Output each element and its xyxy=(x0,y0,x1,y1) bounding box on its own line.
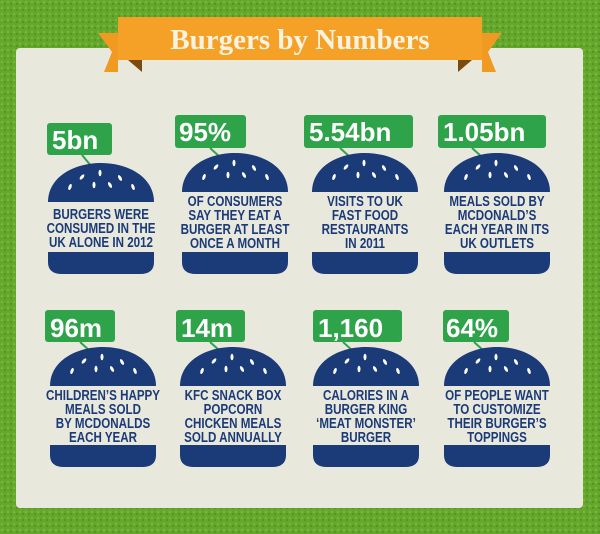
burger: 1,160 xyxy=(313,310,419,467)
burger: 5bn xyxy=(47,123,156,274)
burger: 1,160: 1,160 xyxy=(318,313,383,343)
burger: 96m: MEALS SOLD xyxy=(65,401,141,417)
burger: 5bn: UK ALONE IN 2012 xyxy=(49,234,153,250)
burger: 96m: CHILDREN’S HAPPY xyxy=(46,387,160,403)
burger: 5.54bn: FAST FOOD xyxy=(332,207,398,223)
burger: 14m: CHICKEN MEALS xyxy=(185,415,282,431)
burger: 96m: BY MCDONALDS xyxy=(56,415,150,431)
burger: 95% xyxy=(175,115,289,274)
title ribbon xyxy=(98,17,502,72)
burger: 1.05bn: MCDONALD’S xyxy=(458,207,537,223)
burger: 64%: OF PEOPLE WANT xyxy=(445,387,549,403)
burger: 96m: 96m xyxy=(50,313,102,343)
burger: 1.05bn: EACH YEAR IN ITS xyxy=(445,221,549,237)
burger: 5bn: BURGERS WERE xyxy=(53,206,149,222)
burger: 14m: 14m xyxy=(181,313,233,343)
burger: 14m: SOLD ANNUALLY xyxy=(184,429,282,445)
burger: 5.54bn: RESTAURANTS xyxy=(322,221,409,237)
burger: 1,160: BURGER KING xyxy=(325,401,407,417)
burger: 96m: EACH YEAR xyxy=(69,429,137,445)
burger: 14m: KFC SNACK BOX xyxy=(185,387,282,403)
burger: 14m: POPCORN xyxy=(204,401,262,417)
burger: 96m xyxy=(45,310,160,467)
burger: 5bn: CONSUMED IN THE xyxy=(47,220,156,236)
burger: 95%: BURGER AT LEAST xyxy=(181,221,289,237)
burger: 1,160: CALORIES IN A xyxy=(323,387,409,403)
burger: 1,160: ‘MEAT MONSTER’ xyxy=(316,415,416,431)
burger: 95%: 95% xyxy=(179,117,231,147)
burger: 14m xyxy=(176,310,286,467)
burger: 1.05bn xyxy=(438,115,550,274)
burger: 64%: 64% xyxy=(446,313,498,343)
burger: 1,160: BURGER xyxy=(341,429,392,445)
burger: 64%: THEIR BURGER’S xyxy=(447,415,547,431)
burger: 95%: ONCE A MONTH xyxy=(190,235,280,251)
burger: 95%: SAY THEY EAT A xyxy=(188,207,282,223)
burger: 5.54bn xyxy=(304,115,418,274)
burger: 5.54bn: VISITS TO UK xyxy=(327,193,403,209)
burger: 64%: TO CUSTOMIZE xyxy=(453,401,541,417)
title ribbon: Burgers by Numbers xyxy=(170,24,430,56)
burger: 5.54bn: 5.54bn xyxy=(309,117,391,147)
burger: 64%: TOPPINGS xyxy=(467,429,527,445)
burger: 95%: OF CONSUMERS xyxy=(188,193,283,209)
burger: 1.05bn: 1.05bn xyxy=(443,117,525,147)
burger: 1.05bn: UK OUTLETS xyxy=(460,235,534,251)
burger: 1.05bn: MEALS SOLD BY xyxy=(449,193,545,209)
burger: 5.54bn: IN 2011 xyxy=(345,235,385,251)
burger: 64% xyxy=(443,310,550,467)
burger: 5bn: 5bn xyxy=(52,125,98,155)
